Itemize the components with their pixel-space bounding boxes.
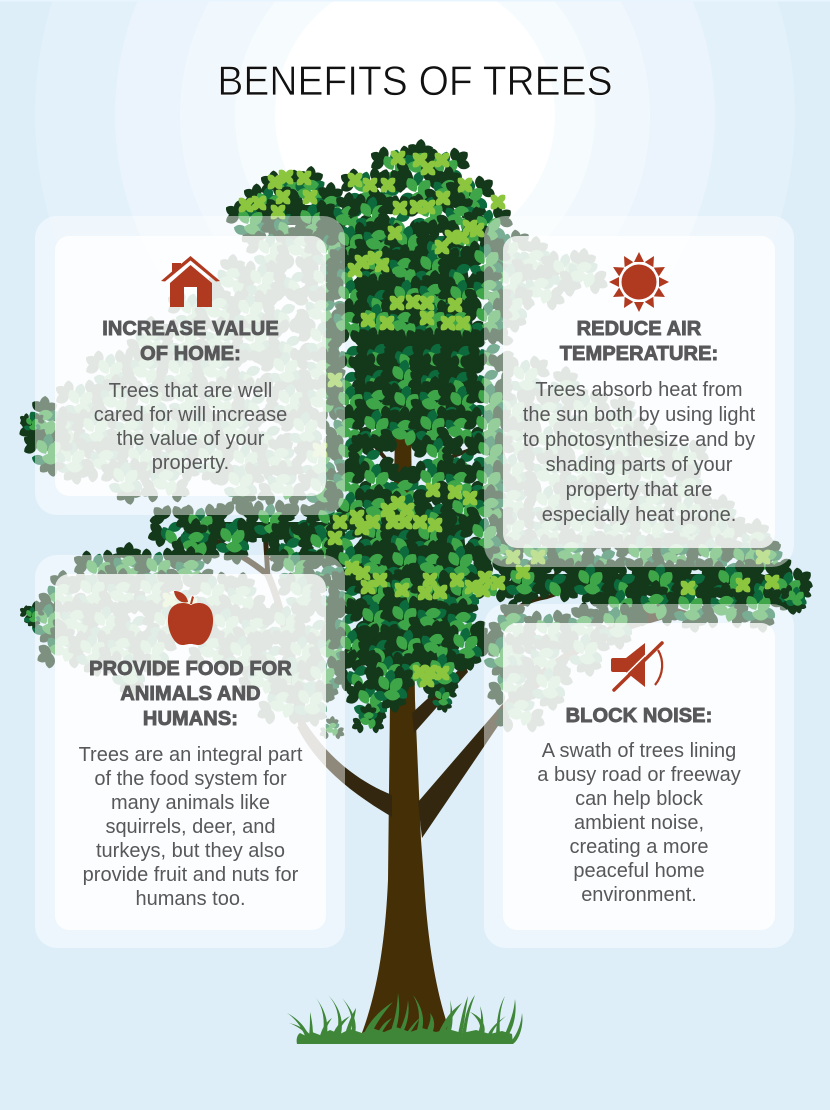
leaf cluster: upper left dimmed limb <box>13 221 360 517</box>
heading: provide food <box>89 658 292 730</box>
branches <box>205 262 700 726</box>
panel: reduce air temperature <box>484 216 794 567</box>
text: increase value of home: Trees that are well <box>109 380 272 402</box>
leaf cluster: far left tip top <box>16 409 48 438</box>
text: block noise: peaceful home <box>573 860 705 882</box>
light green star leaves <box>161 149 781 689</box>
trunk <box>360 430 452 1038</box>
leaf cluster: right limb band <box>463 526 820 635</box>
leaf cluster: middle left limb <box>17 493 363 730</box>
leaf cluster: top left crown <box>219 163 369 261</box>
text: reduce air temperature: to photosynthesize and by <box>523 429 755 451</box>
text: reduce air temperature: Trees absorb heat from <box>535 379 743 401</box>
text: provide food: humans too. <box>135 888 246 910</box>
title: BENEFITS OF TREES <box>217 57 613 104</box>
text: provide food: Trees are an integral part <box>79 744 302 766</box>
text: provide food <box>79 744 302 910</box>
upper right branch <box>412 664 468 733</box>
leaf cluster: right limb tip <box>777 580 816 615</box>
text: block noise: a busy road or freeway <box>537 764 741 786</box>
heading: provide food: ANIMALS AND <box>120 683 261 705</box>
text: block noise <box>537 740 741 906</box>
text: provide food: many animals like <box>111 792 270 814</box>
text: provide food: squirrels, deer, and <box>105 816 276 838</box>
heading: reduce air temperature: REDUCE AIR <box>577 318 701 340</box>
text: reduce air temperature <box>523 379 756 526</box>
panel inner: provide food <box>55 574 326 930</box>
text: increase value of home: cared for will increase <box>94 404 287 426</box>
dark canopy underlay <box>195 205 770 680</box>
leaf cluster: central crown <box>317 138 522 737</box>
canopy: leaf clusters <box>13 138 820 742</box>
heading: increase value of home: INCREASE VALUE <box>102 318 279 340</box>
leaf cluster: right limb lower dimmed <box>469 596 647 738</box>
text: reduce air temperature: the sun both by using light <box>523 404 755 426</box>
text: increase value of home: the value of your <box>117 428 264 450</box>
text: reduce air temperature: especially heat prone. <box>542 504 736 526</box>
text: reduce air temperature: property that are <box>566 479 712 501</box>
heading: provide food: PROVIDE FOOD FOR <box>89 658 292 680</box>
heading: reduce air temperature: TEMPERATURE: <box>560 343 718 365</box>
heading: provide food: HUMANS: <box>143 708 238 730</box>
panel: provide food <box>35 555 345 948</box>
text: increase value of home: property. <box>152 452 229 474</box>
panel: increase value of home <box>35 216 345 515</box>
text: block noise: environment. <box>581 884 697 906</box>
text: block noise: ambient noise, <box>574 812 704 834</box>
panel inner: block noise <box>503 623 775 930</box>
text: provide food: of the food system for <box>94 768 287 790</box>
big right branch <box>418 603 690 838</box>
leaf cluster: small lower left sprig <box>317 715 347 742</box>
text: increase value of home <box>94 380 287 474</box>
panel: block noise <box>484 604 794 948</box>
leaf cluster: right dimmed limbs <box>475 223 787 570</box>
text: block noise: A swath of trees lining <box>542 740 736 762</box>
heading: block noise: BLOCK NOISE: <box>566 705 712 727</box>
text: block noise: creating a more <box>570 836 708 858</box>
heading: increase value of home: OF HOME: <box>140 343 241 365</box>
text: reduce air temperature: shading parts of your <box>546 454 732 476</box>
big left branch <box>297 722 392 817</box>
text: block noise: can help block <box>575 788 703 810</box>
panel inner: increase value of home <box>55 236 326 496</box>
leaf cluster: far left tip middle <box>16 601 48 630</box>
text: provide food: provide fruit and nuts for <box>83 864 298 886</box>
heading: increase value of home <box>102 318 279 365</box>
text: provide food: turkeys, but they also <box>96 840 285 862</box>
grass <box>287 993 522 1044</box>
panel inner: reduce air temperature <box>503 236 775 548</box>
heading: reduce air temperature <box>560 318 718 365</box>
